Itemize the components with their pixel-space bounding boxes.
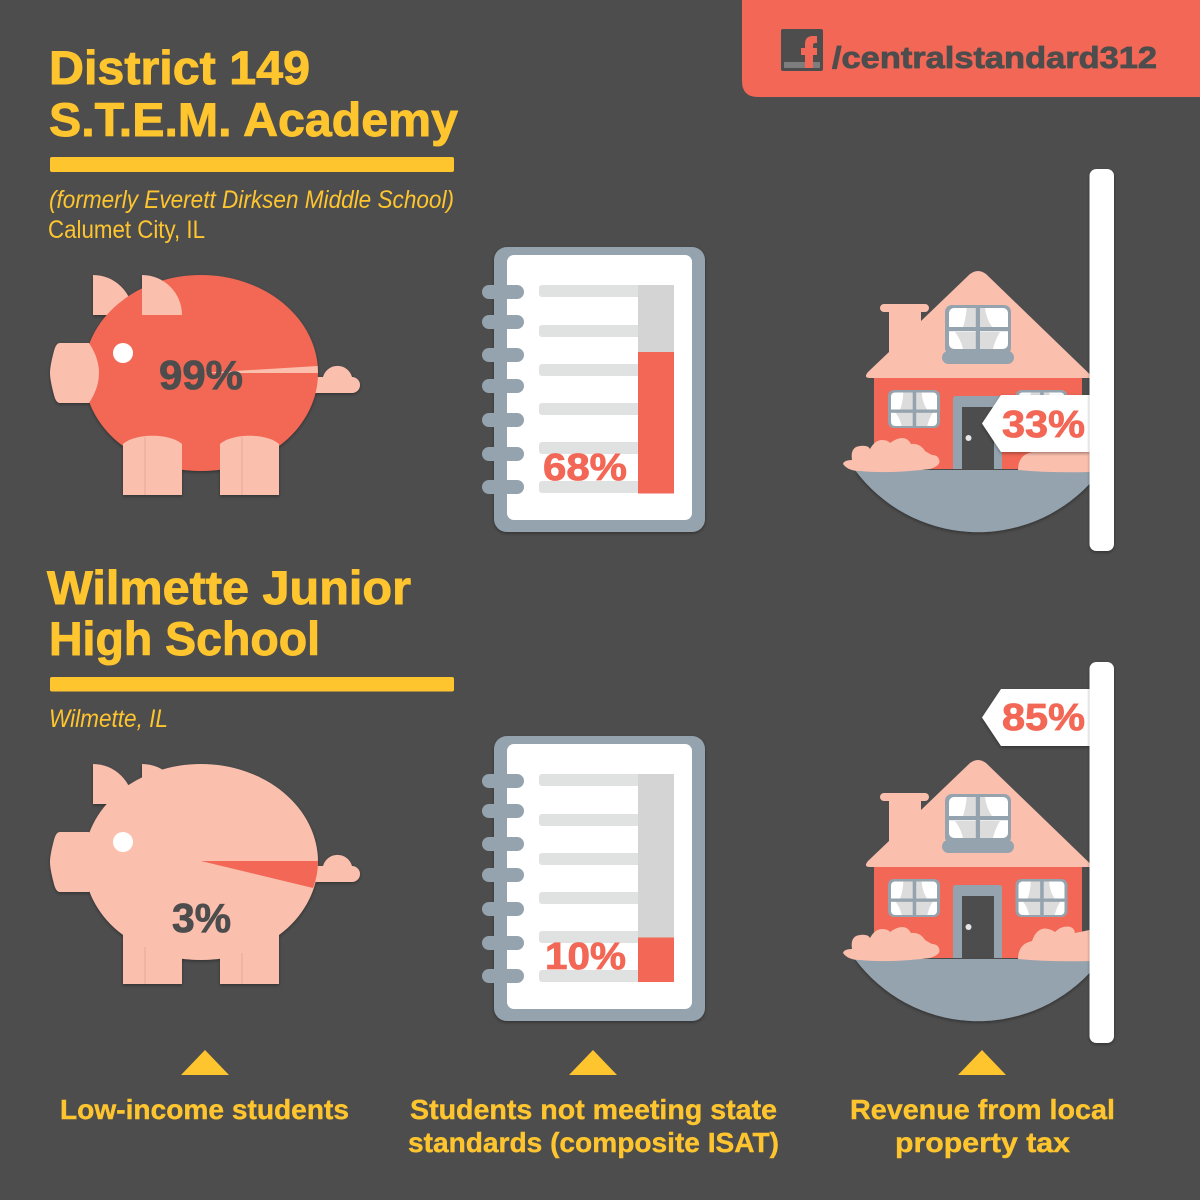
legend: revenue from local property tax [850, 1050, 1115, 1158]
legend: revenue from local property tax: Revenue from local [850, 1094, 1115, 1125]
legend: low-income students: Low-income students [60, 1094, 349, 1125]
pig chart: 99% low-income: 99% [159, 352, 243, 398]
pole: bottom [1090, 662, 1114, 1043]
notebook chart: 68% not meeting standards: 68% [543, 447, 627, 489]
title: District 149: S.T.E.M. Academy [49, 93, 458, 146]
pig chart: 3% low-income: 3% [172, 895, 231, 941]
legend: revenue from local property tax: property tax [895, 1127, 1070, 1158]
legend: students not meeting state standards: Students not meeting state [410, 1094, 777, 1125]
house: top [843, 271, 1090, 532]
pig chart: 3% low-income [50, 764, 360, 984]
legend: students not meeting state standards [408, 1050, 779, 1158]
title: Wilmette Junior High School: High School [49, 612, 320, 665]
title: Wilmette Junior High School: Wilmette Junior [47, 561, 411, 614]
legend: low-income students [60, 1050, 349, 1125]
tag: 33% [982, 395, 1090, 452]
subtitle: district 149 location: Calumet City, IL [48, 216, 205, 244]
subtitle: district 149 location [48, 186, 454, 244]
pig chart: 99% low-income [50, 275, 360, 495]
subtitle: district 149 location: (formerly Everett Dirksen Middle School) [49, 186, 454, 214]
subtitle: Wilmette location: Wilmette, IL [49, 705, 168, 733]
title: District 149: District 149 [49, 41, 310, 94]
title: Wilmette Junior High School [47, 561, 411, 665]
title: District 149 [49, 41, 458, 146]
tag: 85% [982, 689, 1090, 746]
banner text: /centralstandard312 [832, 40, 1157, 75]
notebook chart: 10% not meeting standards [482, 736, 705, 1021]
notebook chart: 10% not meeting standards: 10% [545, 936, 626, 978]
house: bottom [843, 760, 1090, 1021]
icon: facebook [781, 29, 823, 71]
tag: 33%: 33% [1002, 404, 1085, 446]
legend: students not meeting state standards: standards (composite ISAT) [408, 1127, 779, 1158]
pole: top [1090, 169, 1114, 551]
tag: 85%: 85% [1002, 697, 1085, 739]
notebook chart: 68% not meeting standards [482, 247, 705, 532]
banner: facebook [742, 0, 1200, 97]
